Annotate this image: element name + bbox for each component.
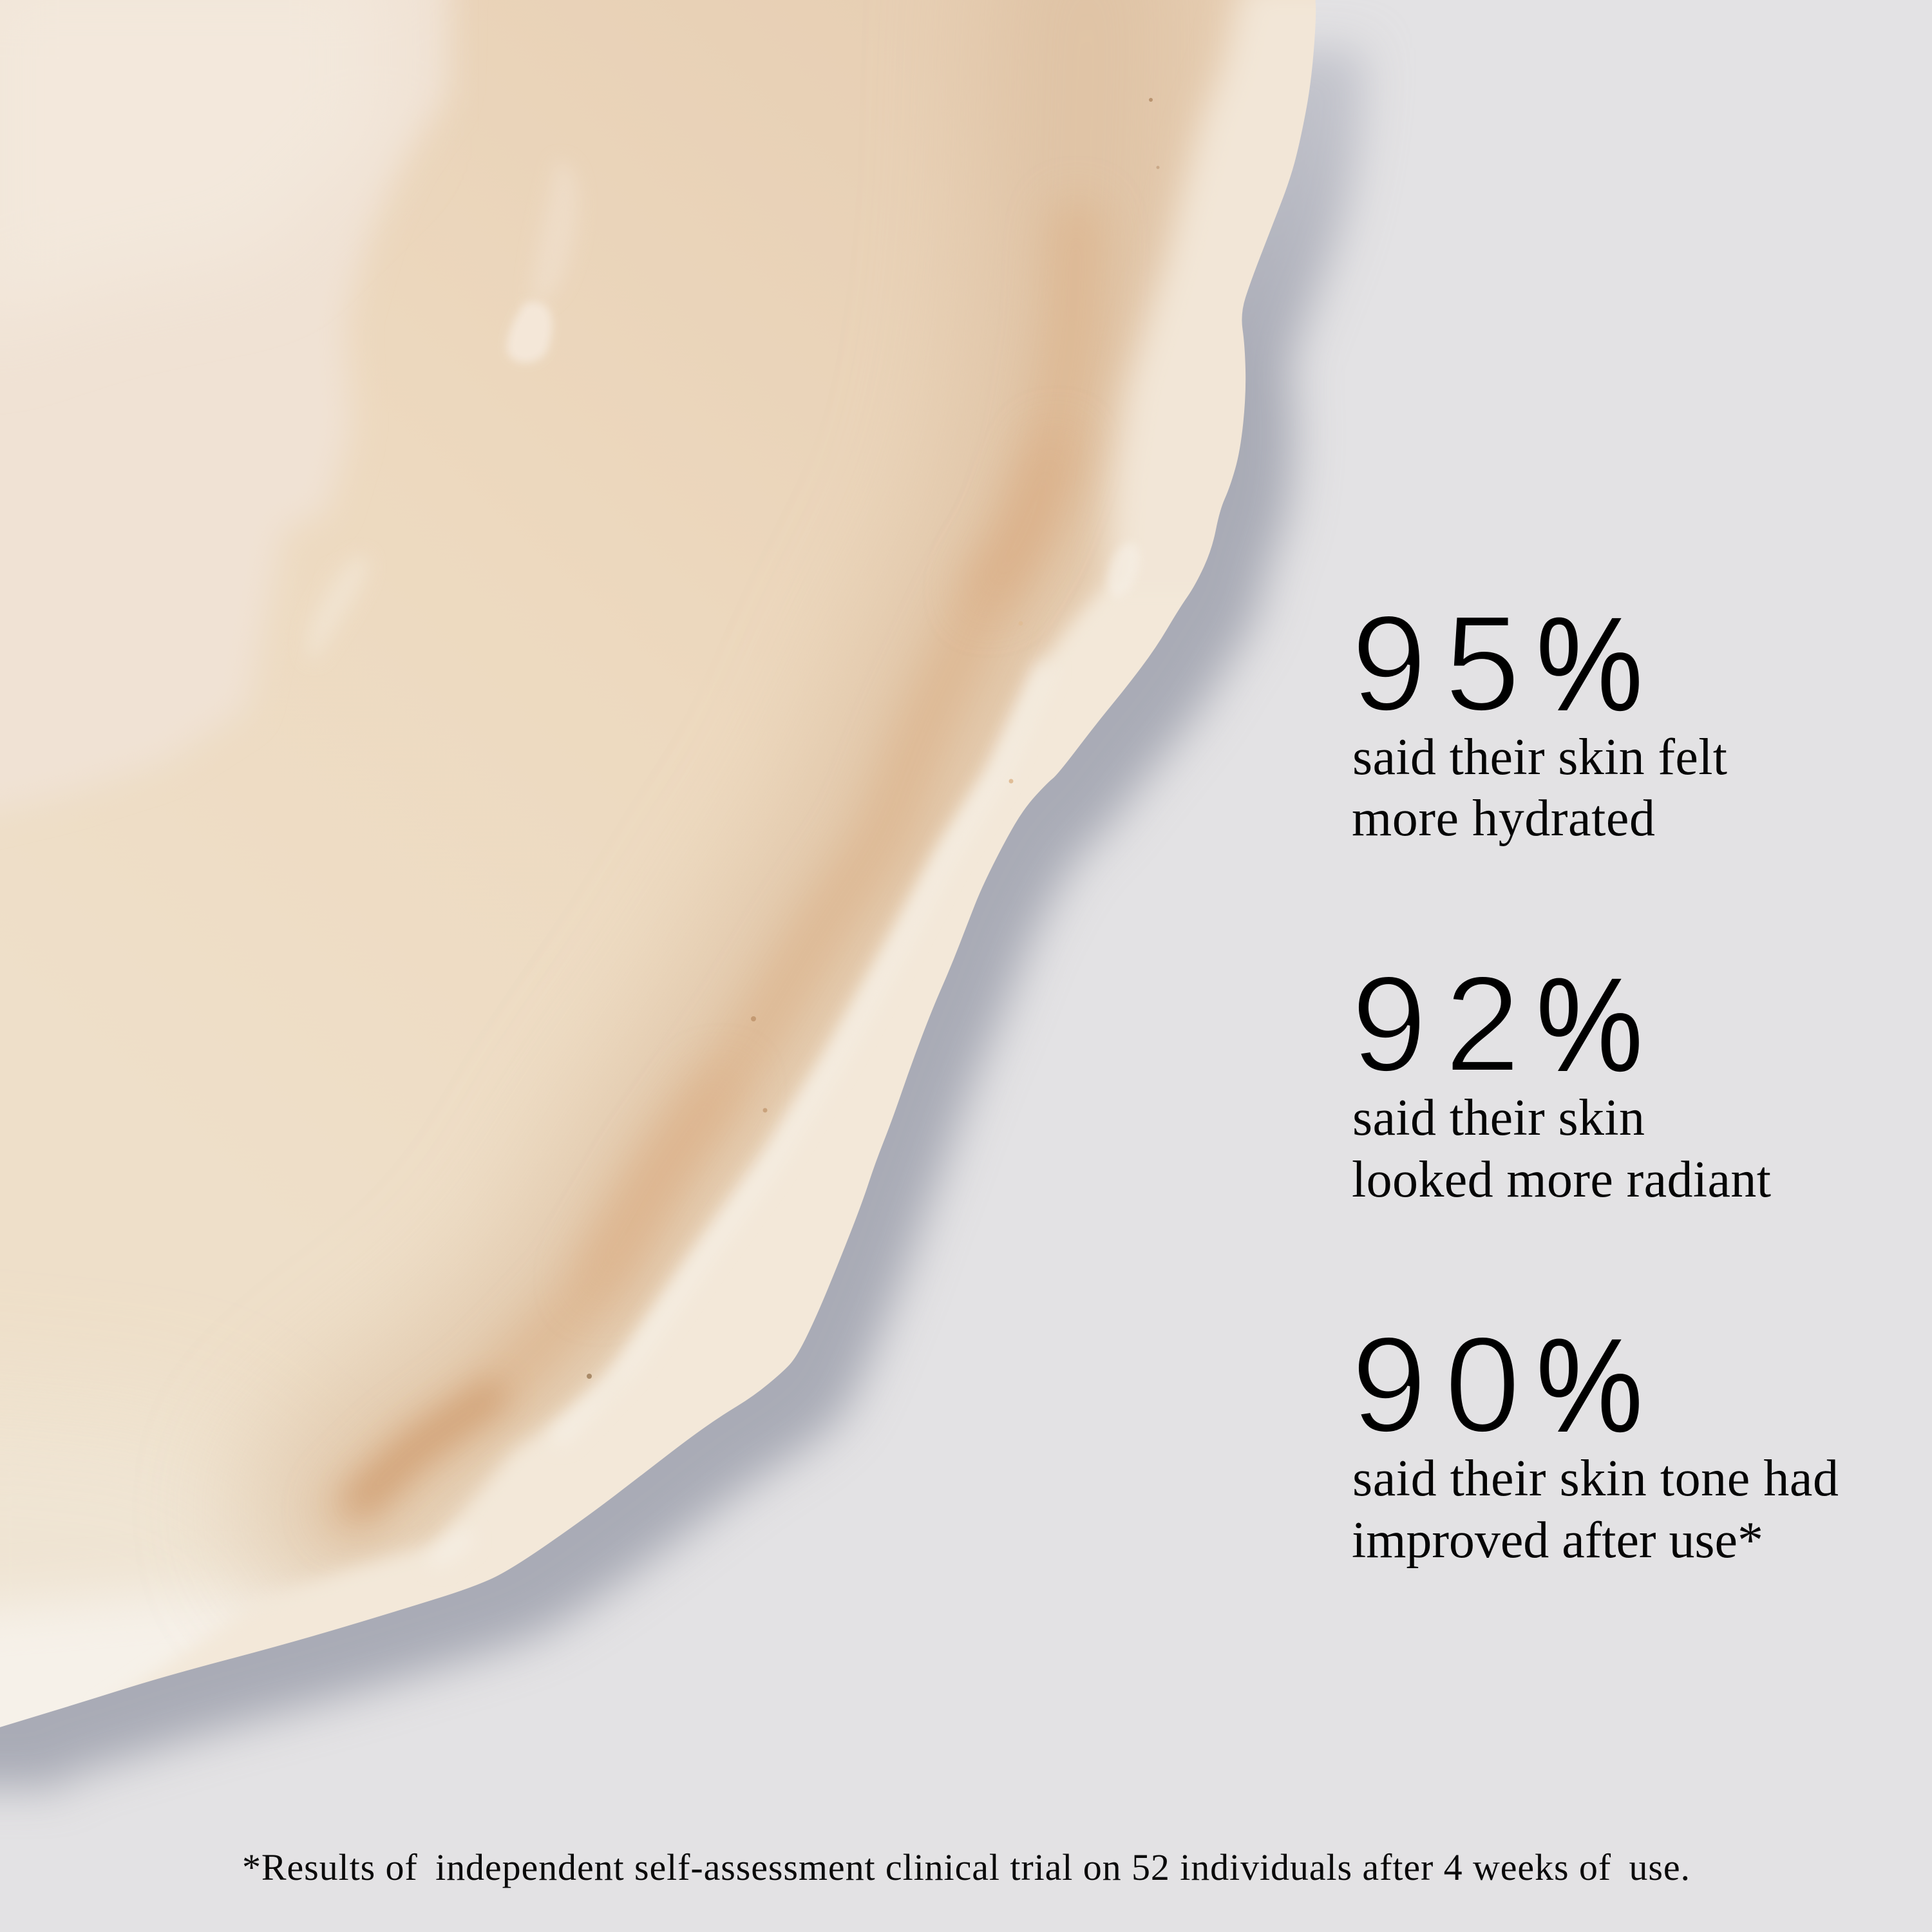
light outer rim upper [1077, 0, 1316, 616]
number 95%: 5 [1444, 587, 1520, 739]
number 90% [1351, 1308, 1643, 1461]
description 95% [1352, 729, 1727, 847]
number 90%: 0 [1444, 1308, 1520, 1461]
description 92%: said their skin [1352, 1090, 1645, 1146]
number 92%: 9 [1351, 947, 1427, 1100]
specks [1149, 98, 1153, 102]
description 90%: improved after use* [1352, 1512, 1763, 1569]
cream swatch [0, 0, 1316, 1727]
description 95%: said their skin felt [1352, 729, 1727, 786]
rim bump highlight [1101, 538, 1146, 601]
number 95% [1351, 587, 1643, 739]
glossy top-left patch [0, 0, 451, 819]
description 95%: more hydrated [1352, 790, 1655, 847]
number 92% [1351, 947, 1643, 1100]
description 90%: said their skin tone had [1352, 1450, 1839, 1507]
stat: 95% [1351, 587, 1727, 847]
footnote: *Results of independent self-assessment clinical trial on 52 individuals after 4 weeks of use. [242, 1846, 1690, 1888]
number 92%: % [1536, 950, 1643, 1099]
description 90% [1352, 1450, 1839, 1569]
description 92%: looked more radiant [1352, 1151, 1771, 1208]
stat: 90% [1351, 1308, 1839, 1569]
light outer rim lower [140, 592, 1152, 1684]
gloss streaks [531, 160, 578, 303]
number 90%: % [1536, 1311, 1643, 1460]
number 92%: 2 [1444, 947, 1520, 1100]
cream drop shadow [0, 0, 1364, 1787]
stat: 92% [1351, 947, 1771, 1208]
description 92% [1352, 1090, 1771, 1208]
number 95%: % [1536, 589, 1643, 739]
number 95%: 9 [1351, 587, 1427, 739]
number 90%: 9 [1351, 1308, 1427, 1461]
